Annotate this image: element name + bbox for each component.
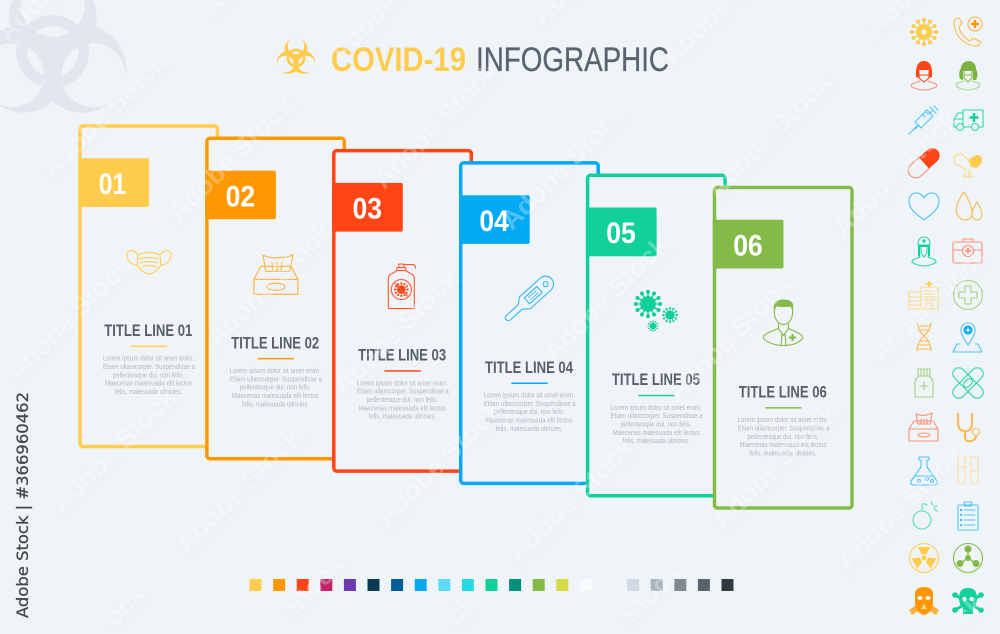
- badge 05: [586, 208, 657, 256]
- body text 05: Maecenas malesuada elit lectus: [613, 430, 700, 437]
- underline: [638, 395, 675, 396]
- watermark overlay: Adobe Stock: [45, 382, 183, 519]
- body text 02: pellentesque dui, non felis.: [240, 385, 311, 392]
- watermark overlay: Adobe Stock: [537, 230, 675, 367]
- title line 02: TITLE LINE 02: [231, 334, 319, 352]
- body text 04: felis, malesuada ultricies.: [496, 426, 563, 433]
- body text 01: felis, malesuada ultricies.: [115, 389, 182, 396]
- heading text: COVID-19: [331, 41, 466, 79]
- title line 01: TITLE LINE 01: [104, 322, 192, 340]
- icon: face mask: [127, 251, 171, 274]
- icon: heart: [909, 193, 939, 220]
- body text 04: [484, 393, 576, 433]
- icon: stethoscope: [958, 413, 980, 441]
- badge 01: 01: [99, 168, 126, 201]
- icon: biohazard: [270, 32, 322, 84]
- body text 03: Maecenas malesuada elit lectus: [359, 405, 446, 412]
- watermark overlay: ock: [98, 579, 152, 632]
- panel: step 01: [78, 126, 218, 446]
- body text 02: felis, malesuada ultricies.: [242, 401, 309, 408]
- watermark overlay: Adobe Stock: [200, 216, 338, 353]
- badge 01: [78, 158, 149, 207]
- body text 03: Lorem ipsum dolor sit amet enim.: [357, 380, 448, 387]
- body text 02: Maecenas malesuada elit lectus: [232, 393, 319, 400]
- heading text: INFOGRAPHIC: [476, 41, 669, 79]
- body text 05: Lorem ipsum dolor sit amet enim.: [611, 405, 702, 412]
- body text 01: Maecenas malesuada elit lectus: [105, 381, 192, 388]
- body text 04: Maecenas malesuada elit lectus: [486, 418, 573, 425]
- badge 02: 02: [226, 180, 255, 213]
- colour palette swatches: [250, 579, 734, 591]
- body text 01: [103, 356, 195, 396]
- body text 06: pellentesque dui, non felis.: [748, 434, 819, 441]
- title line 03: TITLE LINE 03: [358, 347, 446, 365]
- badge 06: 06: [733, 230, 763, 262]
- body text 05: [611, 405, 703, 445]
- icon: ambulance: [954, 110, 983, 130]
- icon: medicine bottle: [915, 369, 933, 397]
- icon: first aid kit: [953, 239, 982, 263]
- icon: test tubes: [957, 457, 979, 484]
- badge 02: [205, 171, 276, 219]
- watermark overlay: ck: [948, 589, 990, 631]
- watermark overlay: Adobe Stock: [831, 440, 969, 577]
- panel: step 02: [205, 138, 344, 459]
- underline: [384, 370, 421, 372]
- icon: skull and crossbones: [952, 588, 984, 614]
- body text 06: Etiam ullamcorper. Suspendisse a: [738, 426, 830, 432]
- badge 03: [332, 183, 403, 232]
- icon: DNA helix: [917, 323, 931, 351]
- icon: syringe: [909, 106, 938, 134]
- icon: map pin: [953, 323, 982, 352]
- body text 05: felis, malesuada ultricies.: [623, 438, 690, 445]
- panel: step 04: [459, 163, 598, 483]
- panel: step 06: [713, 188, 852, 508]
- title line 04: TITLE LINE 04: [485, 359, 574, 377]
- body text 06: [738, 417, 830, 458]
- badge 04: 04: [479, 205, 509, 238]
- icon: virus particles: [634, 290, 678, 332]
- watermark overlay: Adobe Stock: [370, 395, 508, 532]
- underline: [258, 358, 294, 359]
- panel: step 03: [332, 151, 471, 471]
- watermark overlay: Adobe Stock: [660, 270, 798, 407]
- body text 03: felis, malesuada ultricies.: [369, 414, 436, 421]
- icon: thermometer: [501, 273, 557, 326]
- body text 05: Etiam ullamcorper. Suspendisse a: [611, 413, 703, 420]
- icon: crossed bandages: [950, 365, 986, 401]
- icon column: [905, 17, 986, 615]
- body text 01: Lorem ipsum dolor sit amet enim.: [103, 356, 194, 363]
- underline: [511, 382, 548, 384]
- body text 06: Maecenas malesuada elit lectus: [740, 442, 827, 449]
- underline: [131, 346, 167, 347]
- watermark overlay: Stock: [278, 550, 350, 621]
- icon: phone with plus: [954, 17, 982, 46]
- watermark overlay: Adobe Stock: [0, 250, 138, 387]
- icon: hospital: [909, 281, 938, 309]
- body text 03: pellentesque dui, non felis.: [367, 397, 438, 404]
- body text 04: Etiam ullamcorper. Suspendisse a: [484, 401, 576, 408]
- icon: virus: [910, 18, 938, 46]
- body text 04: pellentesque dui, non felis.: [494, 409, 565, 416]
- icon: tissue box: [254, 254, 298, 294]
- icon: molecule: [954, 544, 982, 572]
- icon: radiation: [910, 544, 938, 572]
- watermark overlay: Adobe Stock: [327, 263, 465, 400]
- stock id text: Adobe Stock | #366960462: [13, 392, 32, 618]
- icon: bomb: [913, 502, 937, 529]
- body text 02: [230, 368, 322, 408]
- watermark overlay: Adobe Stock: [495, 98, 633, 235]
- watermark overlay: ck: [441, 589, 483, 631]
- watermark overlay: Adobe Stock: [162, 90, 300, 227]
- icon: flask: [911, 457, 937, 485]
- body text 04: Lorem ipsum dolor sit amet enim.: [484, 393, 575, 400]
- badge 03: 03: [352, 193, 382, 226]
- watermark overlay: Adobe Stock: [827, 105, 965, 242]
- watermark overlay: Adobe Stock: [700, 67, 838, 204]
- body text 06: Lorem ipsum dolor sit amet enim.: [738, 417, 829, 424]
- watermark overlay: Adobe Stock: [35, 47, 173, 184]
- watermark overlay: Adobe Stock: [367, 57, 505, 194]
- body text 06: felis, malesuada ultricies.: [750, 450, 817, 458]
- title line 05: TITLE LINE 05: [612, 371, 700, 389]
- underline: [765, 407, 802, 409]
- icon: plus in circle: [954, 280, 982, 310]
- icon: drops: [956, 192, 982, 220]
- icon: woman with mask, green: [956, 61, 980, 90]
- panel: step 05: [586, 175, 725, 496]
- icon: tissue box small: [909, 413, 938, 441]
- watermark overlay: Stock: [615, 558, 687, 629]
- body text 02: Etiam ullamcorper. Suspendisse a: [230, 376, 322, 383]
- heading text: [331, 41, 669, 79]
- icon: gas mask: [909, 587, 939, 615]
- icon: clipboard: [958, 502, 978, 530]
- body text 03: Etiam ullamcorper. Suspendisse a: [357, 389, 449, 396]
- watermark overlay: Adobe Stock: [170, 422, 308, 559]
- watermark overlay: Adobe Stock: [865, 241, 993, 368]
- watermark overlay: Adobe Stock: [502, 432, 640, 569]
- body text 02: Lorem ipsum dolor sit amet enim.: [230, 368, 321, 375]
- badge 05: 05: [606, 217, 636, 250]
- icon: large biohazard background mark: [0, 0, 153, 152]
- icon: capsule: [905, 145, 943, 181]
- body text 05: pellentesque dui, non felis.: [621, 421, 692, 428]
- title: [270, 32, 669, 84]
- title line 06: TITLE LINE 06: [739, 384, 827, 402]
- badge 04: [459, 195, 530, 244]
- icon: nurse: [912, 237, 936, 266]
- badge 06: [713, 220, 784, 268]
- watermark overlay: Adobe Stock: [706, 398, 844, 535]
- body text 01: Etiam ullamcorper. Suspendisse a: [103, 364, 195, 371]
- body text 03: [357, 380, 449, 421]
- icon: sanitizer bottle: [388, 264, 415, 309]
- icon: doctor: [763, 300, 803, 346]
- body text 01: pellentesque dui, non felis.: [113, 372, 184, 379]
- icon: woman with mask, red: [911, 61, 937, 90]
- icon: open pill: [954, 154, 982, 177]
